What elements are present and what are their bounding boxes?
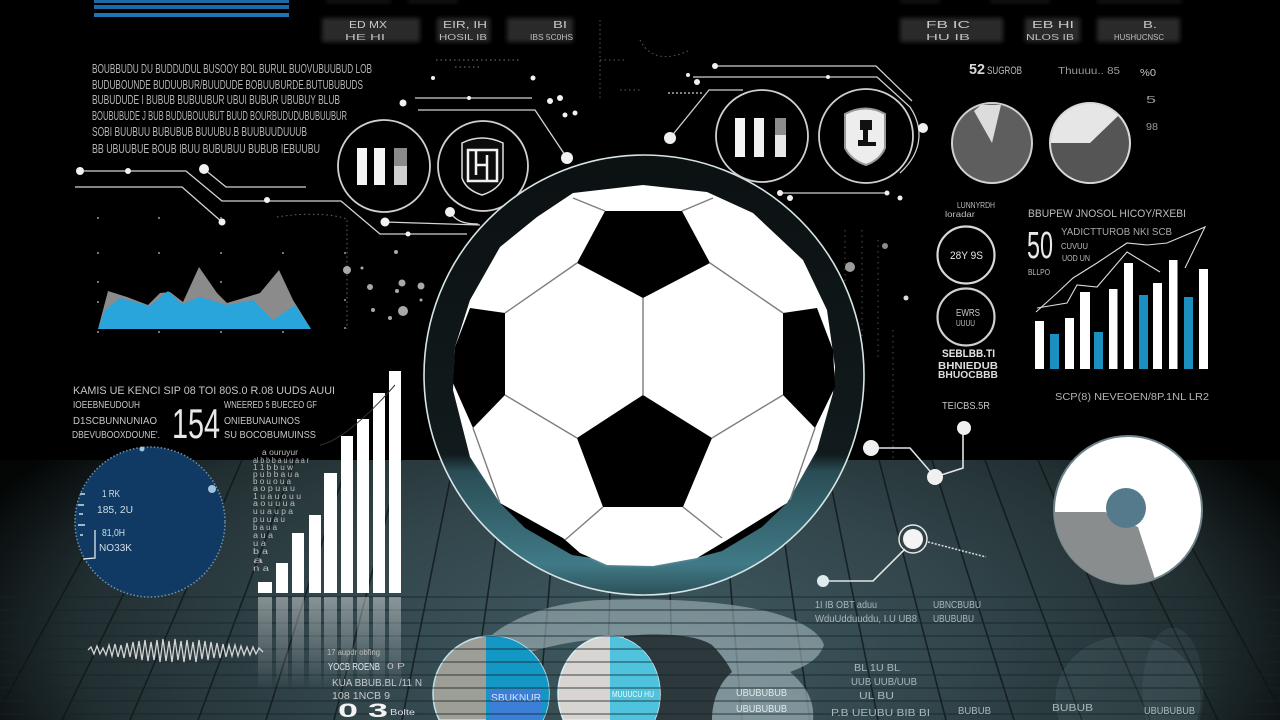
- top data tables: IBS 5C0HS: [530, 33, 573, 42]
- soccer ball: [453, 185, 835, 566]
- bar chart annotations: al b b b a u u a a r: [253, 456, 309, 465]
- floor captions: UBUBUBU: [933, 614, 974, 625]
- bar chart right: [1027, 208, 1209, 403]
- floor captions: 0 P: [387, 662, 405, 671]
- reflected pie caption: SBUKNUR: [491, 693, 541, 704]
- bar chart annotations: a o u u u a: [253, 499, 296, 508]
- bar chart annotations: u a: [253, 539, 267, 548]
- black pentagon: right: [783, 308, 835, 428]
- bar chart left: [253, 371, 401, 690]
- ring gauge 2: [938, 288, 994, 346]
- bar chart annotations: 1 1 b b u w: [253, 463, 293, 472]
- donut chart: [1054, 436, 1202, 584]
- bar chart annotations: b o u o u a: [253, 477, 292, 486]
- bar chart annotations: p u u a u: [253, 515, 285, 524]
- ring gauge group: [938, 201, 998, 412]
- bar chart annotations: p u b b a u a: [253, 470, 300, 479]
- node network lower: [817, 525, 986, 587]
- top left paragraph: BUDUBOUNDE BUDUUBUR/BUUDUDE BOBUUBURDE.BUTUBUBUDS: [92, 77, 363, 92]
- reflection blobs on floor: [470, 599, 1203, 720]
- badge: bars icon right: [716, 90, 808, 182]
- floor captions: BUBUB: [958, 706, 991, 717]
- connector lines: left network: [75, 76, 578, 236]
- blue data circle: 1 RK: [102, 489, 120, 500]
- waveform: [88, 639, 263, 662]
- floor captions: UBNCBUBU: [933, 600, 981, 611]
- bar chart heading: [1027, 208, 1186, 277]
- ring gauge 1: 28Y 9S: [950, 250, 983, 262]
- floor captions: BUBUB: [1052, 703, 1093, 714]
- bars: [1035, 260, 1208, 369]
- top data tables: HOSIL IB: [439, 33, 487, 42]
- top data tables: BI: [553, 20, 567, 31]
- ring gauge group: BHNIEDUB: [938, 361, 998, 372]
- top data tables: HU IB: [926, 33, 970, 42]
- top data tables: ED MX: [349, 20, 387, 31]
- floor captions: 1I IB OBT aduu: [815, 600, 877, 611]
- blue data circle: 81,0H: [102, 528, 125, 539]
- bar chart heading: 50: [1027, 225, 1053, 267]
- pie headings: %0: [1140, 68, 1156, 79]
- top data tables: HUSHUCNSC: [1114, 33, 1164, 42]
- badge: crest icon right: [819, 89, 913, 183]
- blue data circle: NO33K: [99, 543, 132, 554]
- black pentagon: bottom: [577, 395, 712, 507]
- stat block left: KAMIS UE KENCI SIP 08 TOI 80S.0 R.08 UUDS AUUI: [73, 385, 335, 397]
- bar chart annotations: a o p u a u: [253, 484, 295, 493]
- stat block left: 154: [172, 400, 220, 447]
- bar chart heading: BBUPEW JNOSOL HICOY/RXEBI: [1028, 208, 1186, 220]
- badge: bars icon left: [338, 120, 430, 212]
- top left paragraph: BOUBUBUDE J BUB BUDUBOUUBUT BUUD BOURBUDUDUBUBUUBUR: [92, 108, 347, 123]
- floor captions: UL BU: [859, 691, 894, 702]
- trend lines: [1036, 227, 1205, 312]
- floor captions: UBUBUBUB: [1144, 706, 1195, 717]
- top left paragraph: [92, 61, 372, 156]
- bar chart annotations: u u a u p a: [253, 507, 294, 516]
- stat block left: [72, 385, 335, 447]
- pie headings: SUGROB: [987, 65, 1022, 77]
- bar chart annotations: b a: [253, 547, 269, 556]
- bars: [258, 371, 401, 593]
- top data tables: FB IC: [926, 20, 970, 31]
- top data tables: HE HI: [345, 33, 385, 42]
- floor captions: BL 1U BL: [854, 663, 900, 674]
- bar chart heading: CUVUU: [1061, 242, 1088, 251]
- bar chart annotations: b a u a: [253, 523, 278, 532]
- floor captions: P.B UEUBU BIB BI: [831, 708, 930, 719]
- floor captions: WduUdduuddu, I.U UB8: [815, 614, 917, 625]
- ring gauge group: TEICBS.5R: [942, 401, 990, 412]
- badge: crest icon left: [438, 121, 528, 211]
- bar chart annotations: a ouruyur: [262, 448, 298, 457]
- stat block left: WNEERED 5 BUECEO GF: [224, 400, 317, 411]
- area chart: [97, 217, 346, 333]
- floor scan lines: [0, 597, 1280, 714]
- ring gauge group: loradar: [945, 210, 975, 219]
- pie chart 1: [952, 103, 1032, 183]
- bar chart annotations: 1 u a u o u u: [253, 492, 301, 501]
- top left paragraph: BUBUDUDE I BUBUB BUBUUBUR UBUI BUBUR UBUBUY BLUB: [92, 92, 340, 107]
- pie headings: Thuuuu.. 85: [1058, 66, 1121, 77]
- blue data circle: 185, 2U: [97, 505, 133, 516]
- stat block left: ONIEBUNAUINOS: [224, 416, 300, 427]
- bar chart annotations: n a: [253, 564, 270, 573]
- top data tables: EB HI: [1032, 20, 1074, 31]
- floor captions: UBUBUBUB: [736, 704, 787, 715]
- node network upper: [863, 421, 971, 485]
- top data tables: B.: [1143, 20, 1157, 31]
- stat block left: IOEEBNEUDOUH: [73, 400, 140, 411]
- reflected pie: blue and grey: [433, 636, 549, 720]
- floor captions: 108 1NCB 9: [332, 691, 390, 702]
- ring gauge group: BHUOCBBB: [938, 370, 998, 381]
- floor captions: [327, 600, 1195, 720]
- pie headings: 98: [1146, 122, 1158, 133]
- pie headings: 5: [1146, 95, 1157, 106]
- floor captions: KUA BBUB.BL /11 N: [332, 678, 422, 689]
- floor captions: UBUBUBUB: [736, 688, 787, 699]
- bar chart axis label: SCP(8) NEVEOEN/8P.1NL LR2: [1055, 392, 1209, 403]
- stat block left: D1SCBUNNUNIAO: [73, 416, 157, 427]
- dotted particles beside ball: [277, 20, 908, 460]
- stat block left: SU BOCOBUMUINSS: [224, 430, 316, 441]
- ring gauge group: SEBLBB.TI: [942, 348, 995, 360]
- bar reflections: [258, 597, 401, 690]
- ball ring: [424, 155, 864, 595]
- black pentagon: left: [453, 308, 505, 428]
- pie chart 2: [1050, 103, 1130, 183]
- top data tables: EIR, IH: [443, 20, 487, 31]
- blue data circle: [75, 446, 225, 597]
- floor captions: UUB UUB/UUB: [851, 677, 917, 688]
- stat block left: DBEVUBOOXDOUNE'.: [72, 430, 160, 441]
- floor captions: 17 aupdr obfing: [327, 648, 380, 657]
- bar chart heading: BLLPO: [1028, 268, 1050, 277]
- ball seams: [473, 198, 815, 540]
- connector lines: right network: [664, 63, 928, 201]
- floor with perspective grid: [0, 460, 1280, 720]
- top left paragraph: BOUBBUDU DU BUDDUDUL BUSOOY BOL BURUL BUOVUBUUBUD LOB: [92, 61, 372, 76]
- reflected pie 2 caption: MUUUCU HU: [612, 690, 654, 699]
- floor captions: YOCB ROENB: [328, 662, 380, 673]
- bar chart annotations: a: [253, 556, 264, 565]
- ring gauge group: LUNNYRDH: [957, 201, 995, 210]
- ring gauge 2: UUUU: [956, 319, 975, 328]
- top stripes: blue header bars: [94, 0, 289, 17]
- top data tables: [322, 0, 1182, 42]
- ring gauge 2: EWRS: [956, 308, 980, 319]
- top data tables: NLOS IB: [1026, 33, 1074, 42]
- bar chart heading: UOD UN: [1062, 254, 1090, 263]
- reflected pie: cyan and pale: [558, 636, 660, 720]
- bar chart heading: YADICTTUROB NKI SCB: [1061, 227, 1172, 238]
- top left paragraph: SOBI BUUBUU BUBUBUB BUUUBU.B BUUBUUDUUUB: [92, 124, 307, 139]
- ring gauge 1: [938, 226, 994, 284]
- top left paragraph: BB UBUUBUE BOUB IBUU BUBUBUU BUBUB IEBUUBU: [92, 141, 320, 156]
- floor captions: Bolte: [390, 708, 416, 717]
- pie headings: [969, 61, 1158, 133]
- bar chart annotations: [253, 448, 309, 573]
- pie headings: 52: [969, 61, 985, 78]
- bar chart annotations: a u a: [253, 531, 274, 540]
- black pentagon: top: [577, 211, 710, 298]
